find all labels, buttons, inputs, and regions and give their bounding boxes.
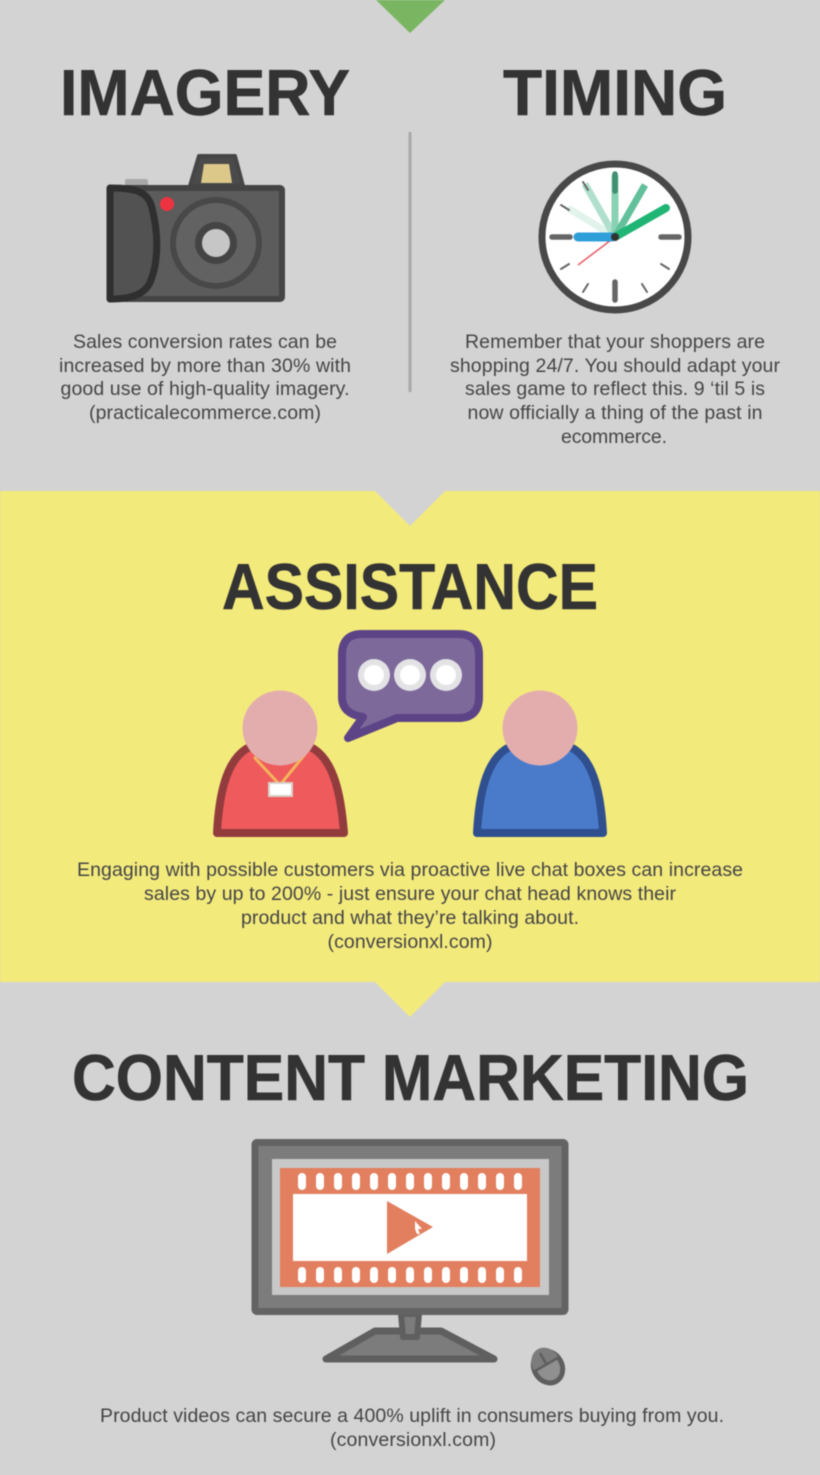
heading: content marketing: CONTENT MARKETING [72, 1041, 749, 1114]
text: assistance body: (conversionxl.com) [328, 931, 492, 953]
text: imagery body: good use of high-quality imagery. [60, 378, 350, 400]
icon: camera [110, 156, 282, 299]
text: imagery body: increased by more than 30% with [59, 355, 351, 377]
icon: mouse [526, 1342, 568, 1388]
heading: assistance: ASSISTANCE [222, 550, 598, 623]
panel: assistance yellow band [0, 491, 820, 982]
text: assistance body: Engaging with possible customers via proactive live chat boxes can increase [77, 859, 743, 881]
icon: monitor with video [255, 1142, 565, 1359]
text: assistance body: sales by up to 200% - just ensure your chat head knows their [144, 883, 676, 905]
text: timing body: sales game to reflect this. 9 ‘til 5 is [465, 378, 765, 400]
text: imagery body [59, 331, 351, 424]
text: content marketing body [100, 1405, 724, 1451]
text: content marketing body: (conversionxl.com) [330, 1429, 496, 1451]
text: timing body: Remember that your shoppers are [465, 331, 765, 353]
icon: speech bubble [342, 634, 479, 738]
text: imagery body: (practicalecommerce.com) [89, 402, 321, 424]
text: timing body: ecommerce. [561, 426, 667, 448]
icon: customer [477, 690, 603, 833]
text: assistance body: product and what they’re talking about. [241, 907, 579, 929]
icon: clock [542, 164, 688, 310]
top arrow: green [376, 0, 445, 33]
text: assistance body [77, 859, 743, 953]
text: imagery body: Sales conversion rates can be [73, 331, 337, 353]
text: timing body [450, 331, 780, 448]
text: content marketing body: Product videos can secure a 400% uplift in consumers buying from you. [100, 1405, 724, 1427]
heading: timing: TIMING [503, 56, 727, 129]
arrow: yellow pointer [375, 982, 445, 1017]
text: timing body: now officially a thing of the past in [468, 402, 762, 424]
text: timing body: shopping 24/7. You should adapt your [450, 355, 780, 377]
icon: sales agent [217, 690, 344, 833]
heading: imagery: IMAGERY [60, 56, 350, 129]
